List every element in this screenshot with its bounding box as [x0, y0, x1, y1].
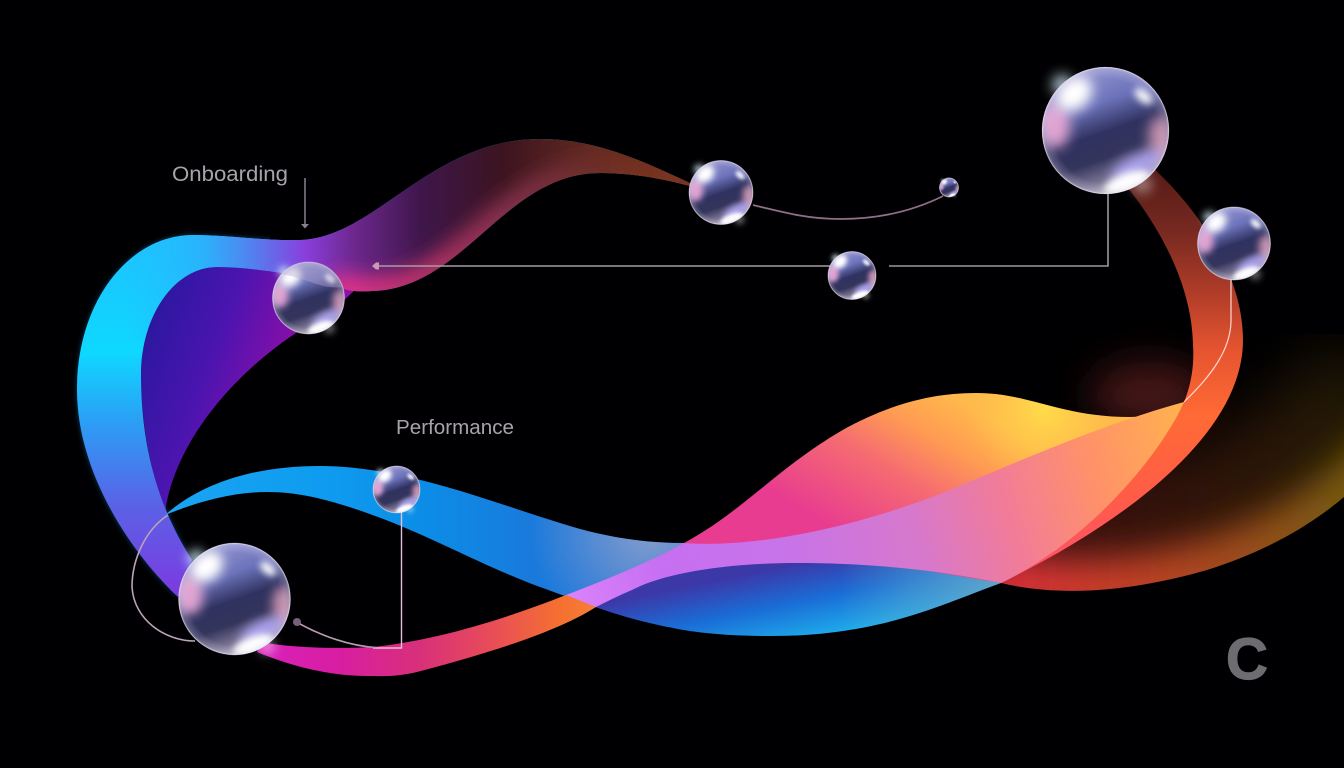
arrow: onboarding pointer	[301, 178, 309, 228]
ribbon: fading amber swoosh	[980, 430, 1344, 590]
ribbon: blue lower belly	[596, 563, 1001, 636]
connector: dotted curve to lower band	[293, 618, 376, 648]
sphere: right on loop	[1196, 207, 1272, 283]
sphere: large lower left	[176, 543, 293, 660]
ribbon: cyan to magenta to brown upper band	[77, 139, 692, 597]
ribbon: red-orange right loop	[1001, 165, 1243, 583]
ribbon: dark purple inner fill	[141, 267, 356, 513]
ribbon glow: blue band	[74, 232, 270, 598]
connector: top curve between spheres	[753, 196, 943, 219]
sphere: performance	[372, 466, 421, 515]
label: Onboarding: Onboarding	[172, 163, 288, 186]
ribbon: blue lower wave	[165, 466, 684, 627]
connector: thin white line from right sphere	[1184, 278, 1231, 402]
logo: C mark: C	[1226, 627, 1268, 692]
label: Performance: Performance	[396, 416, 514, 439]
ribbon: lavender crossing overlap	[566, 402, 1184, 607]
connector: loop around lower sphere	[132, 515, 195, 641]
sphere: upper middle	[688, 160, 754, 227]
sphere: tiny far end	[939, 178, 959, 198]
ember glow behind right loop	[1090, 361, 1210, 429]
ribbon: orange and pink wave	[684, 393, 1184, 583]
sphere: middle on line	[827, 252, 877, 302]
connector: elbow up to large sphere	[889, 190, 1108, 266]
infographic canvas	[73, 65, 1344, 680]
ribbon: magenta to orange lower band	[257, 590, 620, 676]
connector: elbow below performance sphere	[373, 510, 402, 648]
sphere: large top right	[1039, 67, 1172, 200]
connector: horizontal line from ribbon to mid sphere	[372, 262, 830, 270]
sphere: onboarding	[271, 262, 346, 337]
